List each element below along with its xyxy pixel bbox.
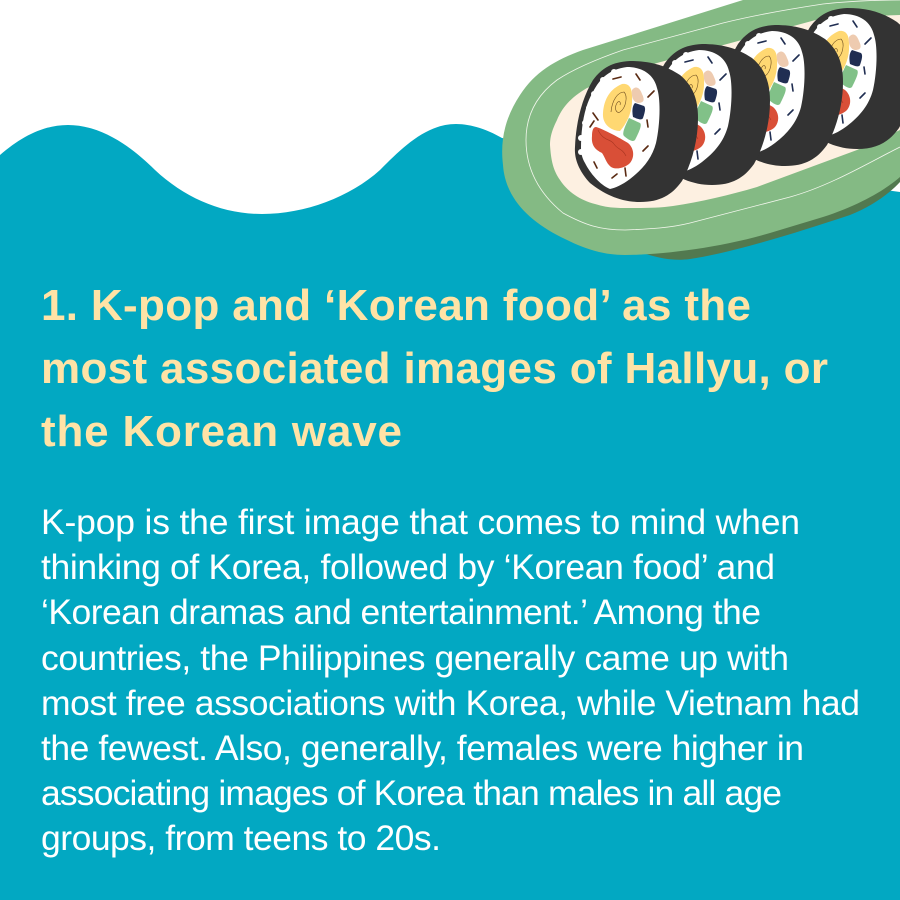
body text: the fewest. Also, generally, females were higher in: [41, 728, 804, 768]
green plate: [502, 0, 900, 255]
body text: thinking of Korea, followed by ‘Korean food’ and: [41, 547, 775, 587]
roll 1: [575, 61, 698, 202]
plate rim line: [526, 0, 900, 230]
body text: most free associations with Korea, while Vietnam had: [41, 683, 860, 723]
heading: the Korean wave: [41, 407, 402, 456]
illustration: kimbap on a green plate: [502, 0, 900, 260]
heading: 1. K-pop and ‘Korean food’ as the: [41, 281, 751, 330]
plate shadow: [640, 165, 900, 260]
body text: ‘Korean dramas and entertainment.’ Among the: [41, 592, 761, 632]
plate cream centre: [550, 15, 900, 208]
roll 4: [792, 8, 900, 149]
body text: countries, the Philippines generally came up with: [41, 638, 789, 678]
heading: [41, 281, 828, 456]
body text: [41, 502, 860, 858]
body text: groups, from teens to 20s.: [41, 818, 441, 858]
roll 3: [720, 25, 843, 166]
body text: K-pop is the first image that comes to mind when: [41, 502, 800, 542]
roll 2: [647, 44, 770, 185]
heading: most associated images of Hallyu, or: [41, 344, 828, 393]
body text: associating images of Korea than males in all age: [41, 773, 782, 813]
